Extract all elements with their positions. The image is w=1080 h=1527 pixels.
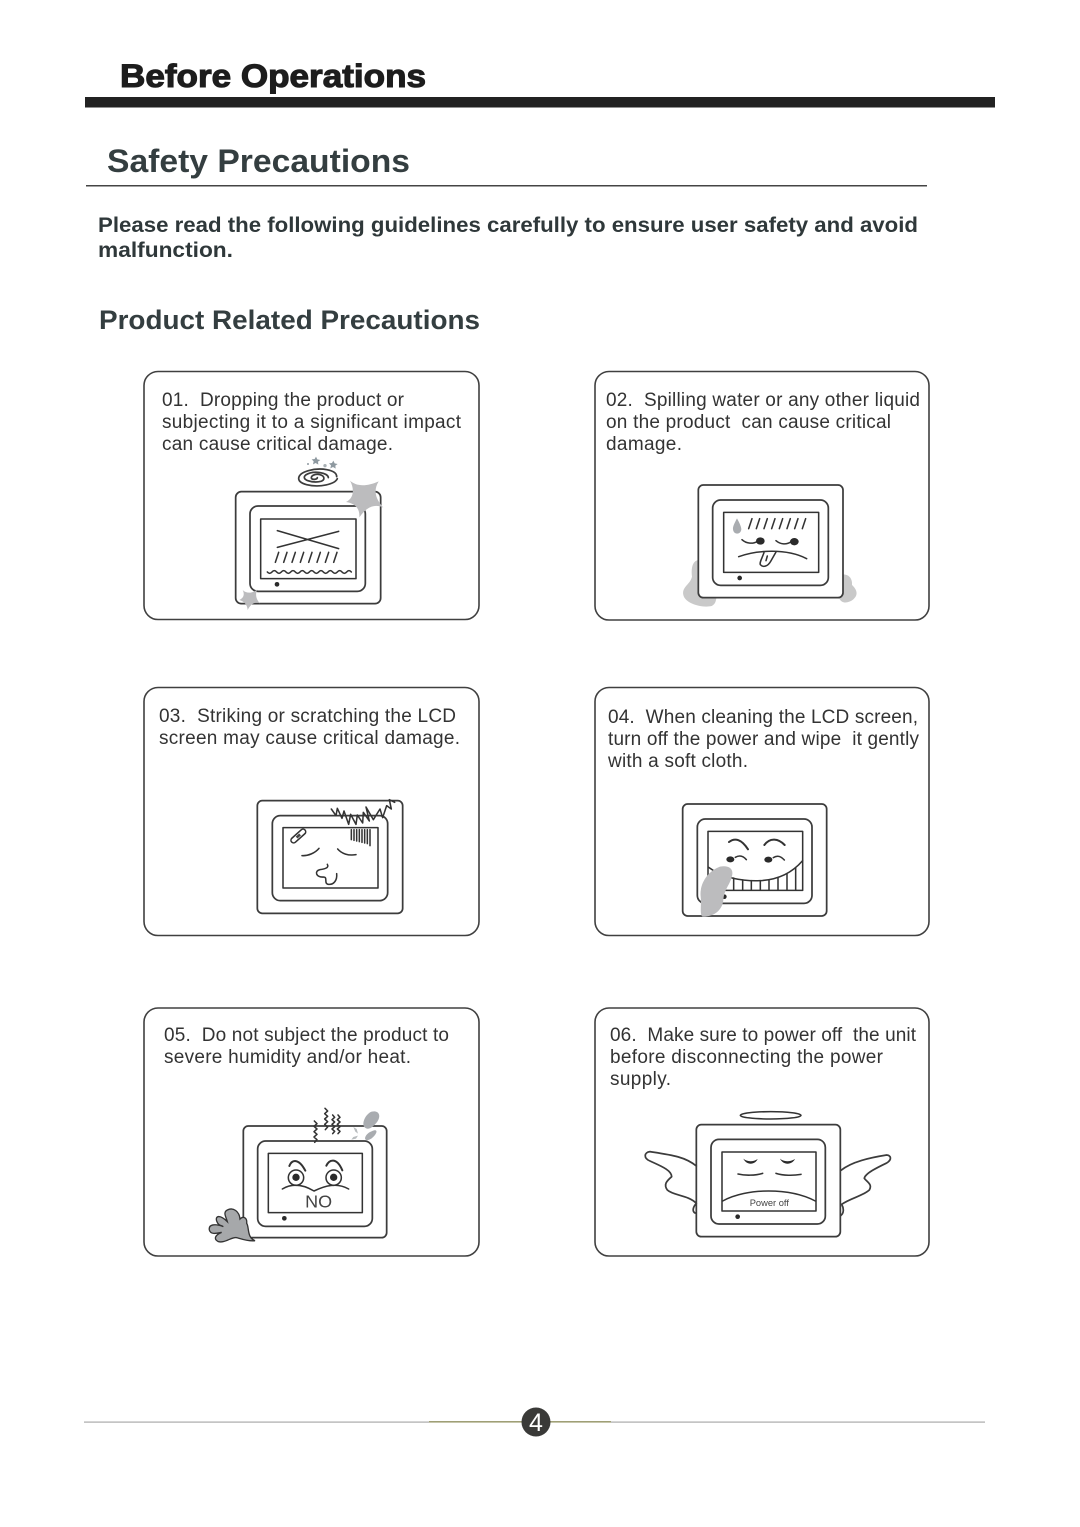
- text: precaution 02: [606, 390, 920, 455]
- panel: 02 spilling liquid: [595, 372, 929, 620]
- icon: scratched monitor with bandage: [257, 800, 403, 913]
- text: precaution 03: 03. Striking or scratching the LCD: [159, 706, 456, 727]
- text: precaution 02: 02. Spilling water or any other liquid: [606, 390, 920, 411]
- subheading: Product Related Precautions: Product Related Precautions: [99, 305, 480, 335]
- panel: 04 cleaning the screen: [595, 688, 929, 936]
- title: Before Operations: Before Operations: [120, 58, 426, 94]
- text: precaution 01: can cause critical damage.: [162, 434, 393, 455]
- icon: dropped monitor with dizzy spiral: [236, 457, 383, 610]
- text: precaution 03: screen may cause critical damage.: [159, 728, 460, 749]
- heading: Safety Precautions: Safety Precautions: [107, 143, 410, 179]
- icon: powered-off angel monitor: Power off: [750, 1198, 789, 1208]
- text: precaution 01: 01. Dropping the product or: [162, 390, 405, 411]
- page number: 4: [529, 1409, 543, 1437]
- panel: 01 dropping: [144, 372, 479, 620]
- intro text: Please read the following guidelines carefully to ensure user safety and avoid: [98, 213, 918, 237]
- heading rule: [86, 185, 927, 186]
- page number: [522, 1408, 550, 1437]
- text: precaution 06: 06. Make sure to power off the unit: [610, 1025, 917, 1046]
- text: precaution 02: damage.: [606, 434, 682, 455]
- text: precaution 05: [164, 1025, 449, 1068]
- footer rule: [84, 1421, 985, 1423]
- text: precaution 04: with a soft cloth.: [607, 751, 748, 772]
- text: precaution 04: [607, 707, 920, 772]
- text: precaution 01: subjecting it to a significant impact: [162, 412, 462, 433]
- header bar: [85, 97, 995, 108]
- text: precaution 06: [610, 1025, 917, 1090]
- icon: smiling monitor wiped by cloth: [683, 804, 827, 917]
- text: precaution 02: on the product can cause critical: [606, 412, 891, 433]
- text: precaution 05: 05. Do not subject the product to: [164, 1025, 449, 1046]
- intro text: [98, 213, 918, 262]
- panel: 06 power off: [595, 1008, 929, 1256]
- panel: 05 humidity and heat: [144, 1008, 479, 1256]
- icon: monitor with heat and steam saying NO: [209, 1108, 387, 1242]
- icon: monitor with heat and steam saying NO: NO: [305, 1192, 332, 1212]
- text: precaution 01: [162, 390, 462, 455]
- text: precaution 04: 04. When cleaning the LCD screen,: [608, 707, 918, 728]
- intro text: malfunction.: [98, 238, 233, 262]
- icon: monitor with spilled water: [683, 485, 857, 607]
- text: precaution 05: severe humidity and/or heat.: [164, 1047, 411, 1068]
- text: precaution 06: before disconnecting the power: [610, 1047, 884, 1068]
- text: precaution 04: turn off the power and wipe it gently: [608, 729, 920, 750]
- text: precaution 06: supply.: [610, 1069, 671, 1090]
- panel: 03 striking the screen: [144, 688, 479, 936]
- icon: powered-off angel monitor: [645, 1112, 890, 1237]
- text: precaution 03: [159, 706, 460, 749]
